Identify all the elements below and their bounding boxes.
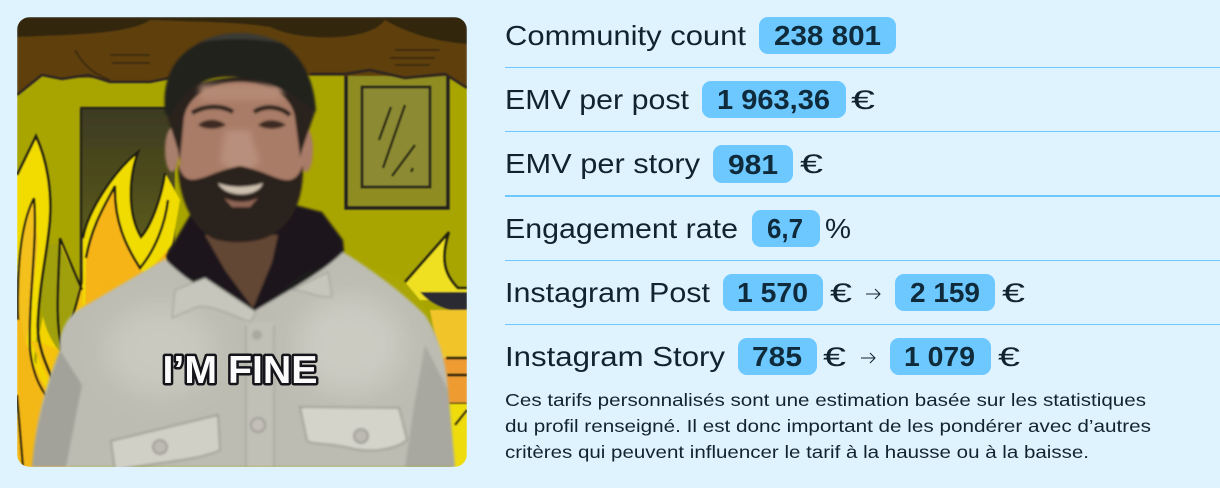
row: Instagram Story: €	[823, 342, 846, 372]
row: community count	[505, 17, 896, 54]
hoodie	[166, 205, 345, 325]
brows	[192, 107, 290, 115]
row: Instagram Story: Instagram Story	[505, 341, 725, 372]
photo: man with beanie in front of a painted wall	[17, 17, 467, 470]
person	[32, 33, 455, 470]
row: community count: 238 801	[774, 20, 881, 51]
row: Instagram Story: €	[998, 342, 1020, 372]
row: EMV per story: €	[800, 149, 823, 179]
row: EMV per story	[505, 145, 823, 183]
row: Instagram Story: 785	[752, 341, 802, 372]
hair	[168, 75, 316, 160]
row: engagement rate: 6,7	[767, 213, 803, 244]
row: EMV per post	[505, 81, 875, 118]
row: Instagram Post: €	[1002, 278, 1025, 308]
row: Instagram Post	[505, 274, 1025, 311]
olive leaf	[41, 243, 78, 352]
row: EMV per post: EMV per post	[505, 84, 689, 115]
row: community count: Community count	[505, 20, 746, 51]
painted wall background	[17, 17, 467, 467]
row: EMV per post: 1 963,36	[717, 84, 830, 115]
row: Instagram Story	[505, 338, 1020, 375]
left pocket flap	[111, 415, 220, 470]
row: EMV per story: EMV per story	[505, 148, 700, 179]
row: engagement rate: Engagement rate	[505, 213, 738, 244]
row: Instagram Post: Instagram Post	[505, 277, 710, 308]
row: Instagram Story: 1 079	[904, 341, 975, 372]
row: Instagram Post: 1 570	[737, 277, 808, 308]
window	[81, 108, 176, 270]
row: Instagram Post: 2 159	[910, 277, 980, 308]
right side painted shapes	[405, 232, 467, 300]
left flames	[17, 139, 50, 370]
row: engagement rate	[505, 210, 851, 247]
curtain	[17, 17, 467, 95]
row: Instagram Post: €	[830, 278, 852, 308]
right pocket flap	[300, 407, 407, 450]
button placket	[245, 322, 275, 467]
neck	[205, 235, 278, 308]
beard	[178, 163, 303, 242]
arrow	[861, 353, 875, 363]
beanie	[164, 33, 316, 118]
caption: I'M FINE: I’M FINE	[162, 349, 318, 392]
arrow	[866, 289, 880, 299]
row: EMV per post: €	[851, 85, 875, 115]
mirror frame	[346, 74, 448, 208]
row divider lines	[505, 67, 1220, 325]
face	[178, 80, 303, 182]
smile	[218, 183, 263, 194]
disclaimer text: critères qui peuvent influencer le tarif à la hausse ou à la baisse.	[505, 442, 1089, 462]
row: engagement rate: %	[825, 213, 851, 244]
eyes	[198, 120, 286, 129]
disclaimer text: Ces tarifs personnalisés sont une estimation basée sur les statistiques	[505, 390, 1146, 410]
shirt	[32, 252, 455, 467]
disclaimer text	[505, 390, 1151, 462]
disclaimer text: du profil renseigné. Il est donc important de les pondérer avec d’autres	[505, 416, 1151, 436]
big flame	[83, 152, 180, 305]
ears	[165, 128, 179, 172]
row: EMV per story: 981	[728, 149, 778, 180]
